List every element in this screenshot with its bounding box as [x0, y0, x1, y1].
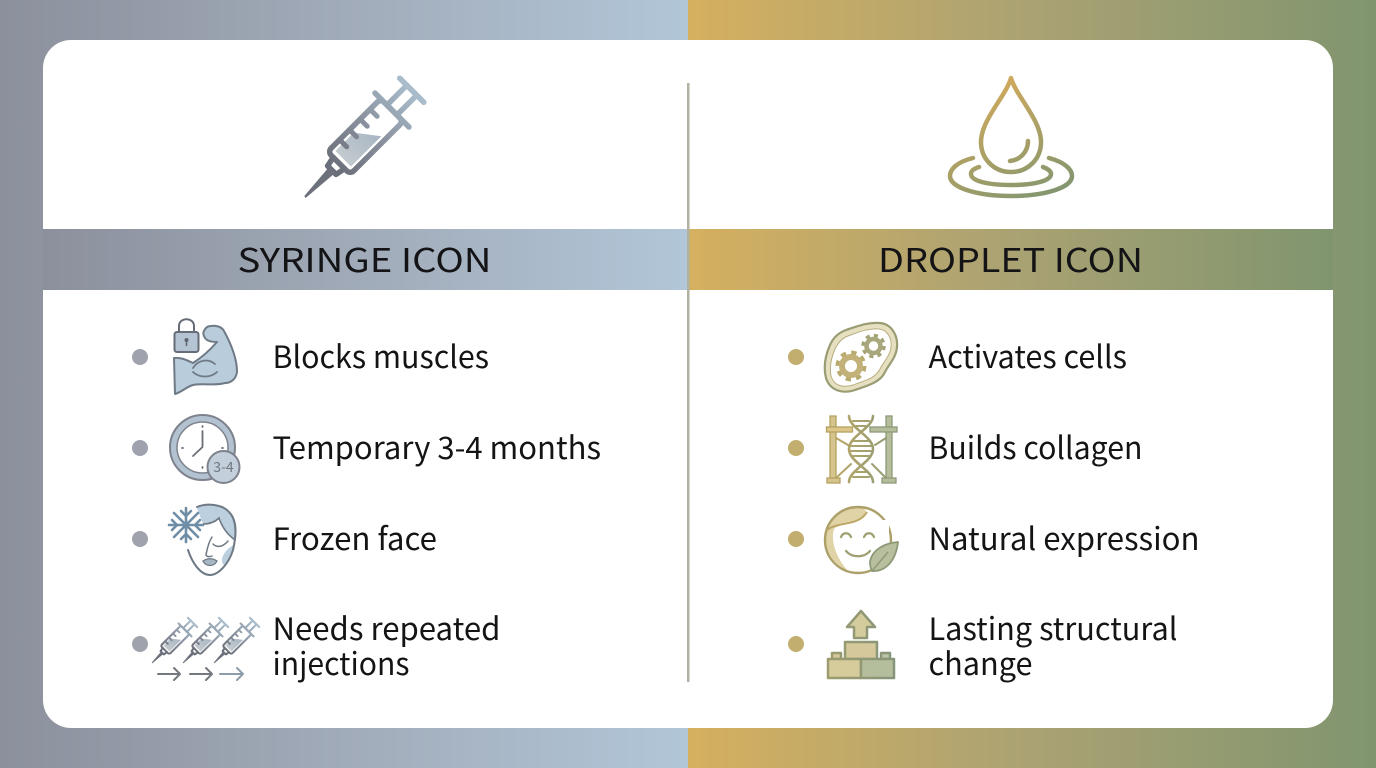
- label: activates cells: Activates cells: [928, 332, 1127, 377]
- heading band: syringe: [43, 229, 688, 290]
- bullet: blocks muscles: [132, 349, 148, 365]
- bullet: frozen face: [132, 531, 148, 547]
- label: natural expression: Natural expression: [928, 514, 1200, 559]
- icon: droplet with ripples: [950, 78, 1072, 196]
- label: frozen face: Frozen face: [272, 514, 437, 559]
- bullet: activates cells: [788, 349, 804, 365]
- heading band: syringe: SYRINGE ICON: [238, 234, 492, 282]
- icon: frozen face: [169, 505, 236, 575]
- label: builds collagen: Builds collagen: [928, 423, 1142, 468]
- background: left half gradient: [0, 0, 688, 768]
- icon: clock with 3-4 badge: 3-4: [213, 457, 234, 477]
- heading band: droplet: [688, 229, 1333, 290]
- center divider: [687, 83, 690, 682]
- bullet: lasting change: [788, 636, 804, 652]
- label: lasting structural change: [928, 604, 1178, 684]
- label: lasting structural change: Lasting structural: [928, 604, 1178, 649]
- icon: locked flexed muscle: [174, 319, 237, 394]
- icon: DNA scaffold: [826, 416, 897, 483]
- label: blocks muscles: Blocks muscles: [272, 332, 489, 377]
- icon: smiling face with leaf: [825, 507, 898, 573]
- icon: clock with 3-4 badge: [170, 415, 240, 483]
- bullet: repeated injections: [132, 636, 148, 652]
- icon: three syringes with arrows: [146, 616, 261, 680]
- background: right half gradient: [688, 0, 1376, 768]
- bullet: temporary: [132, 440, 148, 456]
- bullet: builds collagen: [788, 440, 804, 456]
- heading band: droplet: DROPLET ICON: [878, 234, 1143, 282]
- label: temporary: Temporary 3-4 months: [272, 423, 601, 468]
- label: lasting structural change: change: [928, 639, 1032, 684]
- label: needs repeated injections: injections: [272, 639, 410, 684]
- label: needs repeated injections: Needs repeated: [272, 604, 500, 649]
- bullet: natural expression: [788, 531, 804, 547]
- panel: syringe column: [43, 73, 688, 684]
- icon: blocks with up arrow: [828, 611, 894, 678]
- label: needs repeated injections: [272, 604, 500, 684]
- icon: cell with gears: [825, 323, 897, 392]
- panel: droplet column: [688, 78, 1333, 684]
- icon: syringe: [289, 73, 429, 213]
